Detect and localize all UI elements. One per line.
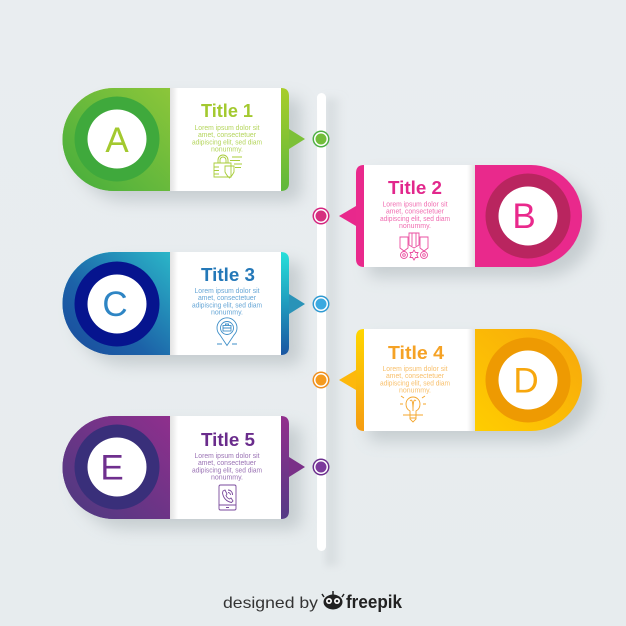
marker C <box>312 296 330 312</box>
content C: nonummy. <box>211 310 243 317</box>
attribution: designed by <box>223 595 318 612</box>
content E: adipiscing elit, sed diam <box>192 467 262 474</box>
panel D: D <box>513 362 539 400</box>
content D: Lorem ipsum dolor sit <box>382 366 448 373</box>
content A: Title 1 <box>201 101 253 121</box>
content D: Title 4 <box>388 343 444 363</box>
content E: nonummy. <box>211 475 243 482</box>
marker A <box>312 130 330 148</box>
content D: amet, consectetuer <box>386 373 445 380</box>
content D: nonummy. <box>399 388 431 395</box>
content A: adipiscing elit, sed diam <box>192 139 262 146</box>
content B: adipiscing elit, sed diam <box>380 216 450 223</box>
content E: Lorem ipsum dolor sit <box>194 453 260 460</box>
marker B <box>312 208 330 224</box>
content E <box>170 416 281 519</box>
panel C <box>63 252 305 365</box>
content B: Lorem ipsum dolor sit <box>382 202 448 208</box>
content B <box>364 165 475 267</box>
content C <box>170 252 281 355</box>
content A: amet, consectetuer <box>198 132 257 139</box>
content D <box>364 329 475 431</box>
content E: amet, consectetuer <box>198 460 257 467</box>
content A <box>170 88 281 191</box>
marker D <box>312 372 330 388</box>
panel C: C <box>102 285 128 324</box>
marker E <box>312 458 330 476</box>
panel B: B <box>512 197 536 236</box>
panel E: E <box>100 448 124 488</box>
panel B <box>339 165 594 277</box>
content B: nonummy. <box>399 223 431 230</box>
content A: nonummy. <box>211 147 243 154</box>
content A: Lorem ipsum dolor sit <box>194 125 260 132</box>
content C: Title 3 <box>201 265 255 285</box>
panel A <box>63 88 305 201</box>
content B: amet, consectetuer <box>386 209 445 216</box>
content C: adipiscing elit, sed diam <box>192 302 262 309</box>
content D: adipiscing elit, sed diam <box>380 380 450 387</box>
content B: Title 2 <box>388 178 442 198</box>
icon: freepik logo <box>322 591 344 610</box>
content C: amet, consectetuer <box>198 295 257 302</box>
attribution: freepik <box>346 592 403 612</box>
panel A: A <box>105 121 129 160</box>
attribution <box>223 591 403 612</box>
panel E <box>63 416 305 529</box>
timeline <box>317 93 344 566</box>
content E: Title 5 <box>201 430 255 450</box>
panel D <box>339 329 594 441</box>
content C: Lorem ipsum dolor sit <box>194 288 260 295</box>
